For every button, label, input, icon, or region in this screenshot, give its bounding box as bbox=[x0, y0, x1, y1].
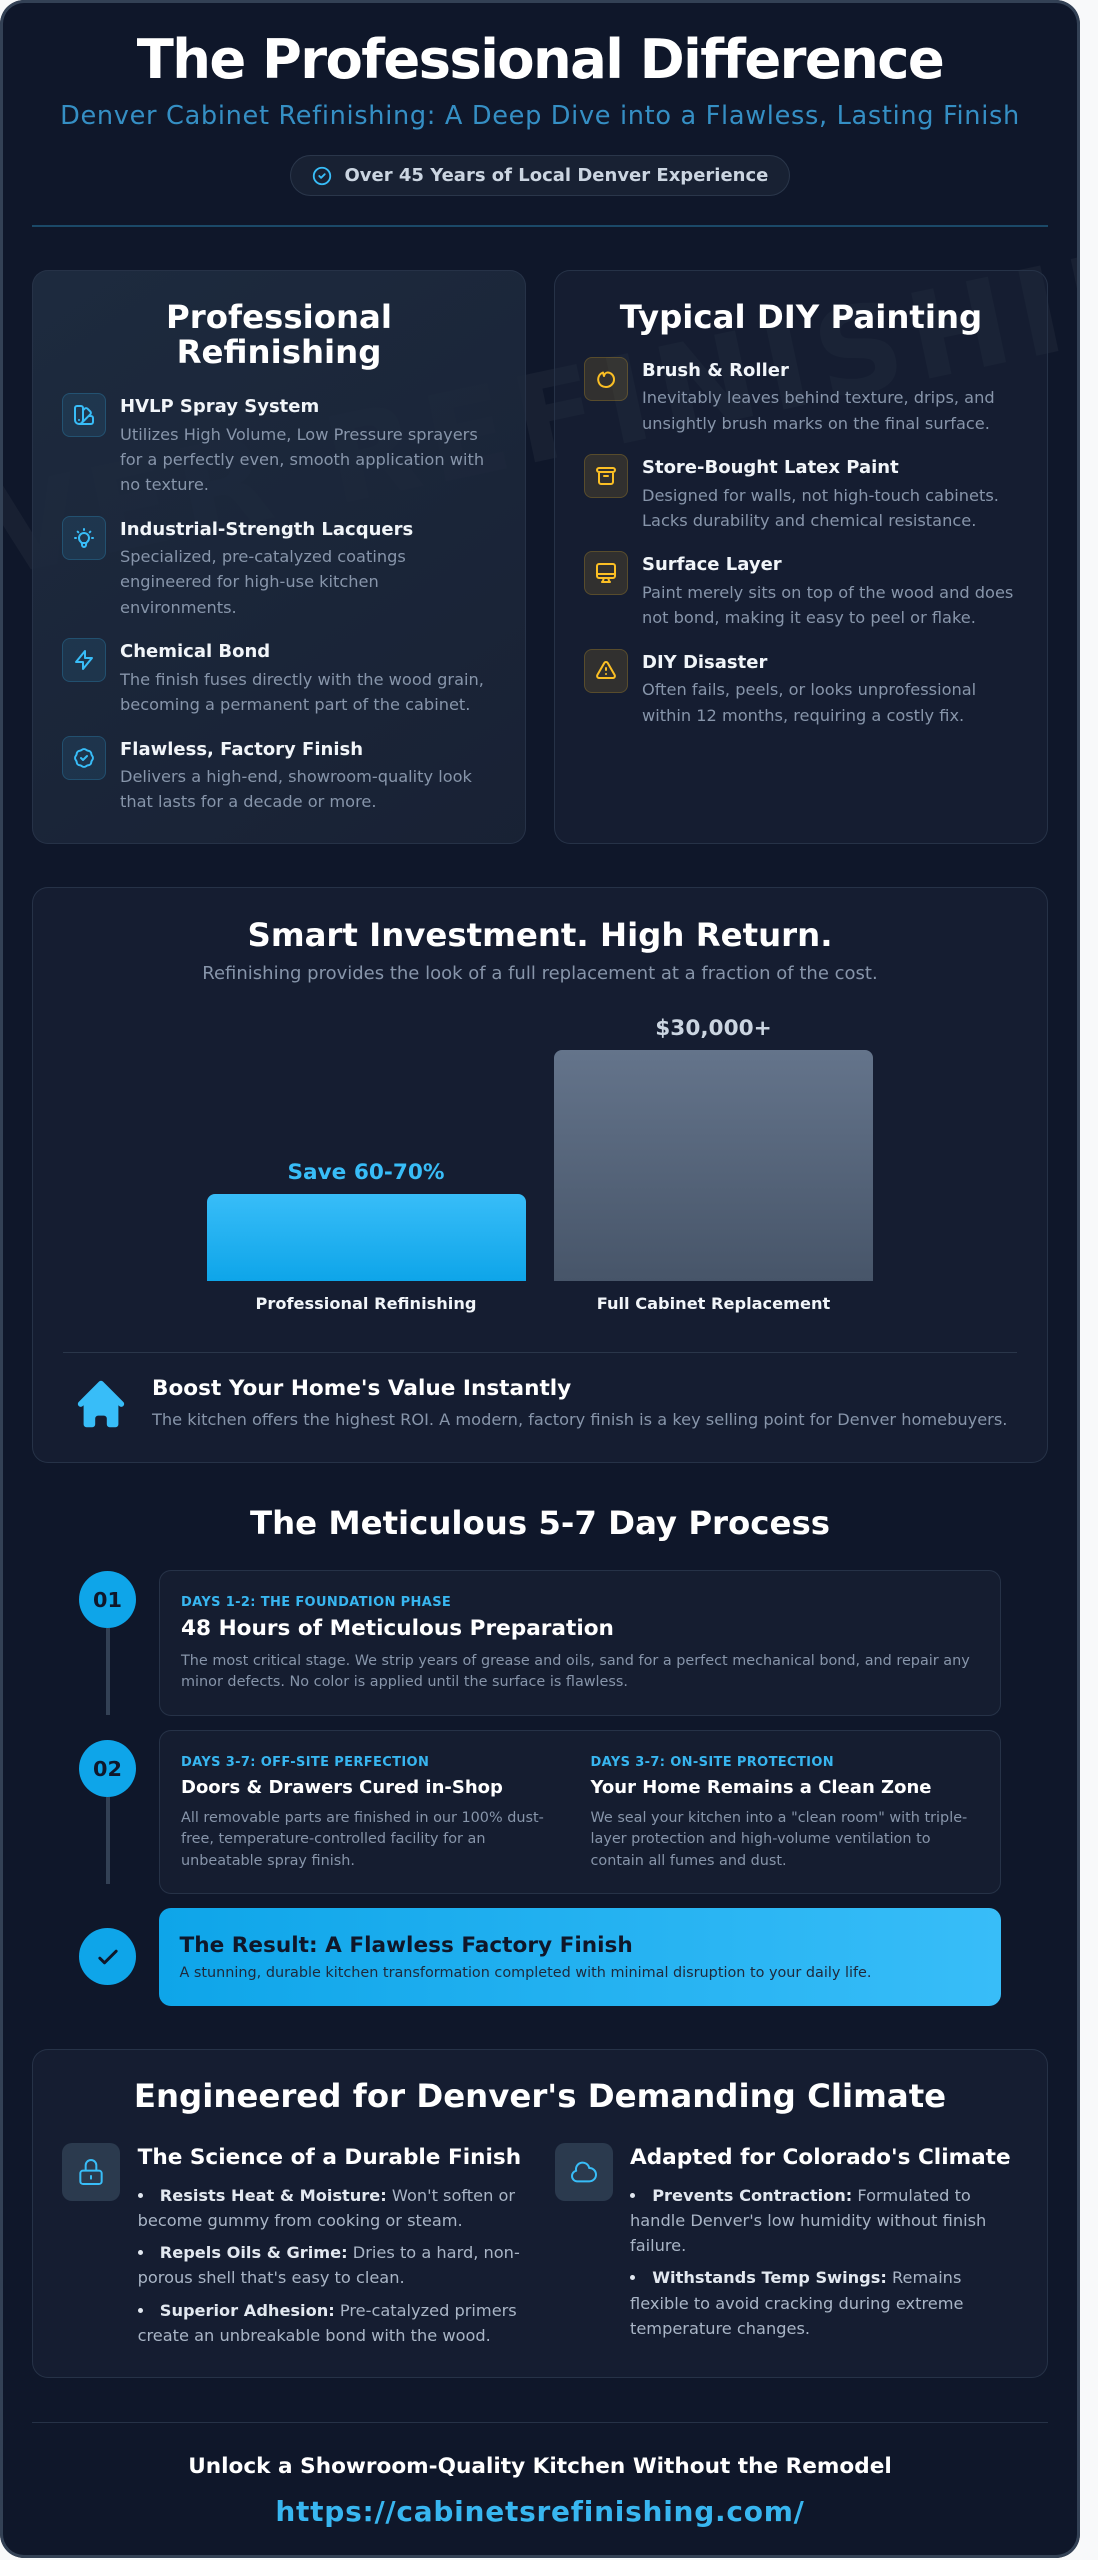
badge text: Over 45 Years of Local Denver Experience bbox=[344, 165, 768, 186]
column heading: The Science of a Durable Finish bbox=[138, 2145, 521, 2170]
heading: Typical DIY Painting bbox=[620, 298, 982, 336]
column heading: Adapted for Colorado's Climate bbox=[630, 2145, 1011, 2170]
benefit list: Resists Heat & Moisture: Won't soften or bbox=[160, 2186, 515, 2205]
heading: Smart Investment. High Return. bbox=[248, 916, 832, 954]
icon: lock bbox=[62, 2143, 120, 2201]
item description: Utilizes High Volume, Low Pressure sprayers bbox=[120, 425, 478, 444]
icon: bolt bbox=[62, 638, 106, 682]
item description bbox=[120, 425, 484, 494]
benefit list: failure. bbox=[630, 2236, 686, 2255]
footer call to action: Unlock a Showroom-Quality Kitchen Without the Remodel bbox=[188, 2454, 892, 2478]
step text: minor defects. No color is applied until the surface is flawless. bbox=[181, 1674, 628, 1690]
on-site column bbox=[590, 1755, 967, 1869]
item title: Flawless, Factory Finish bbox=[120, 738, 363, 760]
bar chart bbox=[207, 1016, 873, 1313]
item title: HVLP Spray System bbox=[120, 396, 319, 417]
benefit list: flexible to avoid cracking during extreme bbox=[630, 2294, 963, 2313]
item description: Delivers a high-end, showroom-quality look bbox=[120, 767, 472, 786]
step text: free, temperature-controlled facility for an bbox=[181, 1831, 485, 1847]
item title: DIY Disaster bbox=[642, 652, 767, 673]
item description: not bond, making it easy to peel or flake. bbox=[642, 608, 976, 627]
step number: 01 bbox=[93, 1588, 122, 1612]
icon: desktop bbox=[584, 551, 628, 595]
step number bbox=[79, 1571, 136, 1628]
heading: Engineered for Denver's Demanding Climate bbox=[134, 2077, 946, 2115]
item description: Paint merely sits on top of the wood and does bbox=[642, 583, 1013, 602]
bar label: Professional Refinishing bbox=[256, 1294, 476, 1313]
item title: Store-Bought Latex Paint bbox=[642, 457, 899, 478]
step: result bbox=[79, 1908, 1001, 2006]
item description bbox=[120, 670, 484, 714]
step title: Your Home Remains a Clean Zone bbox=[590, 1777, 931, 1798]
off-site column bbox=[181, 1755, 544, 1869]
icon: badge check bbox=[62, 736, 106, 780]
chart divider bbox=[63, 1352, 1017, 1353]
step card bbox=[158, 1570, 1001, 1716]
item title: Chemical Bond bbox=[120, 641, 270, 662]
footer divider bbox=[32, 2422, 1048, 2423]
benefit list: porous shell that's easy to clean. bbox=[138, 2268, 405, 2287]
benefit list: Withstands Temp Swings: Remains bbox=[652, 2268, 961, 2287]
item description: The finish fuses directly with the wood grain, bbox=[120, 670, 484, 689]
item description: Designed for walls, not high-touch cabinets. bbox=[642, 486, 999, 505]
benefit list: Repels Oils & Grime: Dries to a hard, non- bbox=[160, 2243, 520, 2262]
benefit list: temperature changes. bbox=[630, 2319, 810, 2338]
item description: no texture. bbox=[120, 475, 209, 494]
panel: denver climate bbox=[32, 2049, 1048, 2378]
experience badge bbox=[290, 155, 790, 196]
benefit list: Prevents Contraction: Formulated to bbox=[652, 2186, 971, 2205]
icon: check circle bbox=[312, 166, 332, 186]
process heading: The Meticulous 5-7 Day Process bbox=[250, 1504, 830, 1542]
item: surface layer bbox=[584, 551, 1013, 627]
item description: Specialized, pre-catalyzed coatings bbox=[120, 547, 406, 566]
subtitle: Denver Cabinet Refinishing: A Deep Dive into a Flawless, Lasting Finish bbox=[60, 101, 1020, 131]
item: flawless factory finish bbox=[62, 736, 472, 811]
value: replacement cost: $30,000+ bbox=[655, 1016, 772, 1040]
heading: Refinishing bbox=[177, 333, 381, 371]
value: save: Save 60-70% bbox=[287, 1160, 445, 1185]
title: The Professional Difference bbox=[137, 28, 943, 90]
benefit list bbox=[630, 2186, 986, 2338]
item description bbox=[120, 547, 406, 617]
step label: DAYS 1-2: THE FOUNDATION PHASE bbox=[181, 1595, 451, 1610]
result title: The Result: A Flawless Factory Finish bbox=[180, 1933, 633, 1958]
timeline connector bbox=[106, 1628, 110, 1715]
item: store-bought latex paint bbox=[584, 454, 999, 530]
item description bbox=[642, 680, 976, 725]
icon: swatch bbox=[62, 393, 106, 437]
item description: environments. bbox=[120, 598, 237, 617]
benefit list bbox=[138, 2186, 520, 2345]
icon: house bbox=[78, 1380, 124, 1428]
bar label: Full Cabinet Replacement bbox=[597, 1294, 830, 1313]
bar: professional refinishing bbox=[207, 1194, 526, 1281]
step label: DAYS 3-7: OFF-SITE PERFECTION bbox=[181, 1755, 429, 1770]
column: colorado climate bbox=[555, 2143, 1011, 2338]
item description: Inevitably leaves behind texture, drips, and bbox=[642, 388, 995, 407]
item description: unsightly brush marks on the final surface. bbox=[642, 414, 990, 433]
panel: typical DIY painting bbox=[554, 270, 1048, 844]
callout title: Boost Your Home's Value Instantly bbox=[152, 1376, 571, 1401]
step title: Doors & Drawers Cured in-Shop bbox=[181, 1777, 503, 1798]
item title: Industrial-Strength Lacquers bbox=[120, 518, 413, 540]
result text: A stunning, durable kitchen transformation completed with minimal disruption to your daily life. bbox=[180, 1965, 871, 1981]
benefit list: become gummy from cooking or steam. bbox=[138, 2211, 463, 2230]
column: durable finish bbox=[62, 2143, 521, 2345]
item description bbox=[642, 486, 999, 530]
item: HVLP spray system bbox=[62, 393, 484, 494]
timeline connector bbox=[106, 1797, 110, 1884]
step 02 bbox=[79, 1730, 1001, 1894]
item: industrial-strength lacquers bbox=[62, 516, 413, 617]
callout text: The kitchen offers the highest ROI. A modern, factory finish is a key selling point for Denver homebuyers. bbox=[152, 1410, 1007, 1429]
step text bbox=[180, 1653, 970, 1690]
item description: Lacks durability and chemical resistance. bbox=[642, 511, 976, 530]
icon: light bulb bbox=[62, 516, 106, 560]
item description: Often fails, peels, or looks unprofessional bbox=[642, 680, 976, 699]
panel: smart investment bbox=[32, 887, 1048, 1463]
item description: becoming a permanent part of the cabinet. bbox=[120, 695, 470, 714]
step text: layer protection and high-volume ventilation to bbox=[590, 1831, 931, 1847]
benefit list: Superior Adhesion: Pre-catalyzed primers bbox=[160, 2301, 517, 2320]
item title: Surface Layer bbox=[642, 554, 782, 575]
item description: that lasts for a decade or more. bbox=[120, 792, 376, 811]
step text bbox=[181, 1810, 544, 1869]
item title: Brush & Roller bbox=[642, 360, 789, 381]
item description: within 12 months, requiring a costly fix. bbox=[642, 706, 964, 725]
subheading: Refinishing provides the look of a full replacement at a fraction of the cost. bbox=[202, 962, 878, 984]
heading: Professional bbox=[166, 298, 392, 336]
step number bbox=[79, 1740, 136, 1797]
result card bbox=[158, 1908, 1001, 2006]
item: DIY disaster bbox=[584, 649, 976, 725]
icon: warning triangle bbox=[584, 649, 628, 693]
heading bbox=[166, 298, 392, 371]
step 01 bbox=[79, 1570, 1001, 1716]
step title: 48 Hours of Meticulous Preparation bbox=[181, 1616, 614, 1641]
header divider bbox=[32, 225, 1048, 227]
step text bbox=[590, 1810, 967, 1869]
item description bbox=[642, 583, 1013, 627]
item description bbox=[642, 388, 995, 433]
icon: check mark bbox=[79, 1928, 136, 1985]
item: chemical bond bbox=[62, 638, 484, 714]
item description: for a perfectly even, smooth application with bbox=[120, 450, 484, 469]
callout: home value bbox=[78, 1376, 1007, 1429]
item description bbox=[120, 767, 472, 811]
step text: contain all fumes and dust. bbox=[590, 1853, 787, 1869]
step label: DAYS 3-7: ON-SITE PROTECTION bbox=[590, 1755, 834, 1770]
step text: All removable parts are finished in our 100% dust- bbox=[181, 1810, 544, 1826]
icon: archive box bbox=[584, 454, 628, 498]
item description: engineered for high-use kitchen bbox=[120, 572, 379, 591]
step number: 02 bbox=[93, 1756, 122, 1780]
panel: professional refinishing bbox=[32, 270, 526, 844]
step text: The most critical stage. We strip years of grease and oils, sand for a perfect mechanical bond, and repair any bbox=[181, 1653, 970, 1669]
step text: unbeatable spray finish. bbox=[181, 1853, 355, 1869]
step text: We seal your kitchen into a "clean room" with triple- bbox=[590, 1810, 967, 1826]
icon: brush blob bbox=[584, 357, 628, 401]
footer url: https://cabinetsrefinishing.com/ bbox=[275, 2495, 805, 2528]
bar: full cabinet replacement bbox=[554, 1050, 873, 1281]
benefit list: create an unbreakable bond with the wood. bbox=[138, 2326, 491, 2345]
benefit list: handle Denver's low humidity without finish bbox=[630, 2211, 986, 2230]
item: brush and roller bbox=[584, 357, 995, 433]
step card bbox=[158, 1730, 1001, 1894]
icon: cloud bbox=[554, 2143, 612, 2201]
